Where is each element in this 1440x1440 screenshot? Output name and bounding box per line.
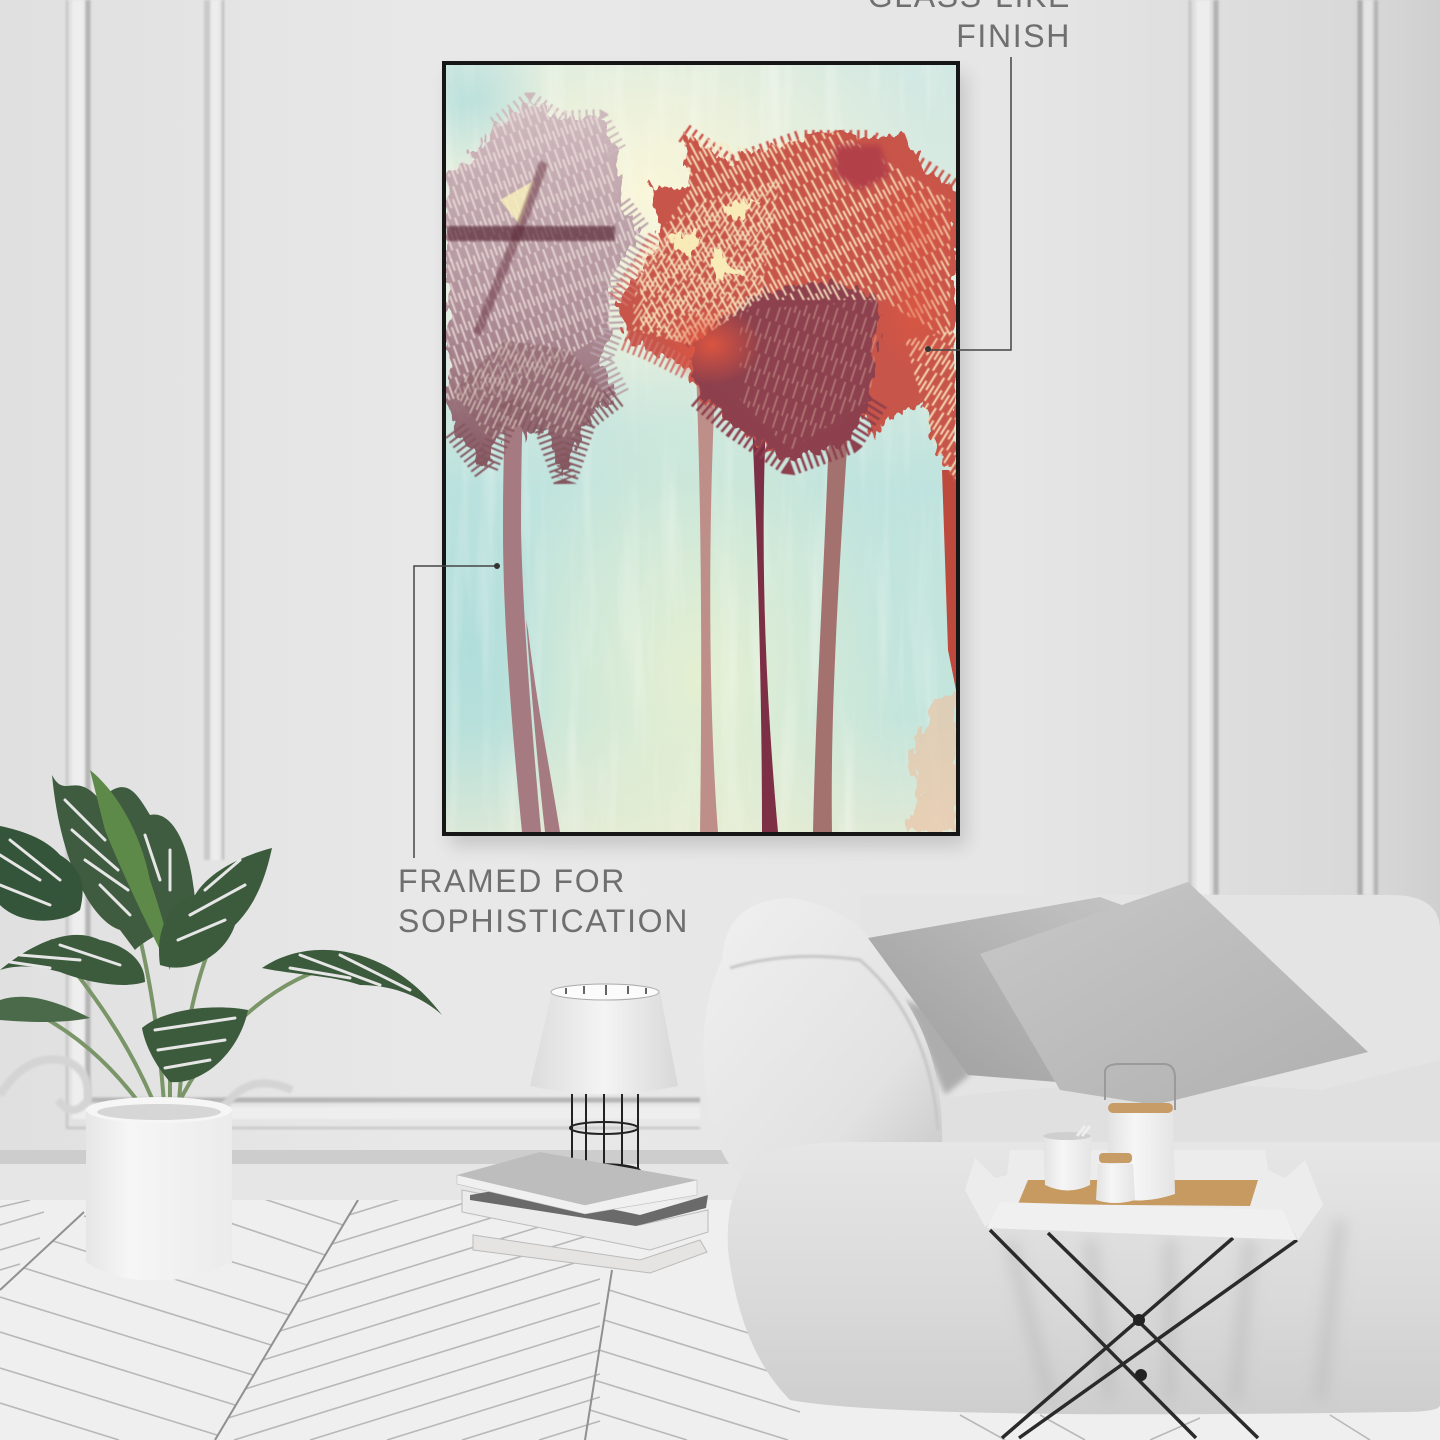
tea set	[1043, 1064, 1175, 1203]
sofa front cushion	[728, 1142, 1440, 1414]
side table	[965, 1150, 1323, 1438]
tray	[965, 1150, 1323, 1240]
sofa back	[860, 895, 1440, 1120]
herringbone floor	[0, 1200, 1440, 1440]
sofa arm	[703, 898, 942, 1180]
framed artwork	[442, 61, 960, 836]
plant pot	[86, 1097, 232, 1280]
book stack	[457, 1152, 708, 1273]
baseboard	[0, 1150, 760, 1200]
table lamp	[530, 984, 678, 1179]
sofa seat	[930, 1060, 1440, 1180]
pillows	[868, 882, 1368, 1105]
lower right foliage	[905, 690, 956, 832]
plant	[0, 770, 442, 1118]
callout: framed for sophistication: FRAMED FOR	[398, 863, 626, 899]
palm red crowns	[618, 130, 965, 832]
sofa	[703, 895, 1440, 1414]
callout: framed for sophistication: SOPHISTICATION	[398, 903, 689, 939]
palm left	[447, 100, 640, 832]
plant stems	[30, 900, 320, 1118]
callout: framed for sophistication	[398, 563, 689, 939]
left palm crown	[447, 100, 640, 480]
left palm trunks	[503, 412, 560, 832]
frame reflection band	[447, 226, 615, 241]
painting shadow	[450, 74, 966, 846]
monstera leaves	[0, 770, 442, 1082]
palm centre trunks	[696, 370, 956, 832]
wall moldings	[0, 0, 1376, 1128]
callout: glass-like finish: FINISH	[956, 18, 1071, 54]
table legs	[990, 1230, 1297, 1438]
callout: glass-like finish	[868, 0, 1071, 352]
left palm frond spine	[473, 160, 548, 335]
sofa shadow	[905, 1000, 970, 1095]
leaf slits	[0, 800, 410, 1068]
